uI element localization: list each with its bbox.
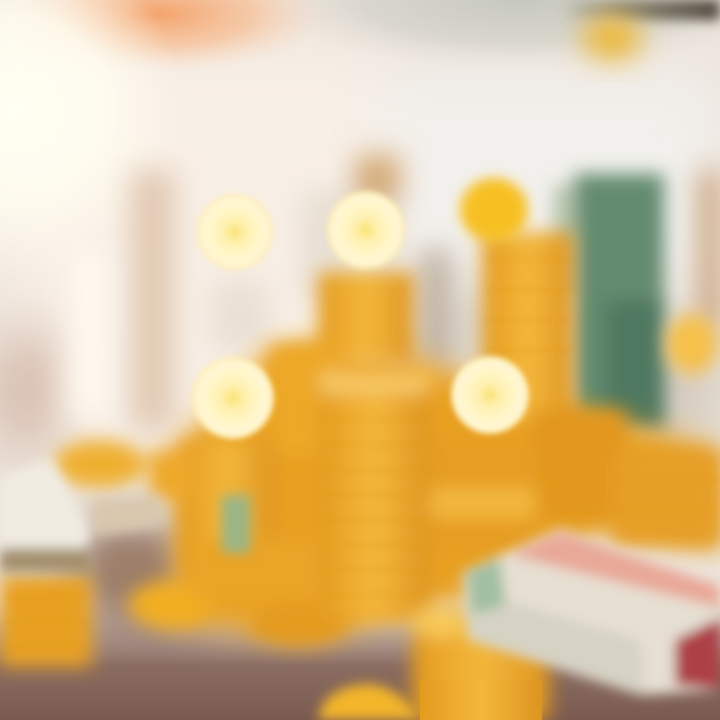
front coin [318,684,420,720]
icon: glowing coins [192,191,529,439]
chart: gold coin stacks [0,178,720,720]
panel: green banknote stack [554,174,665,430]
gold mass behind stacks [170,340,720,640]
green accent [222,495,250,553]
panel: white box left [0,458,165,572]
coin ridges [2,260,720,646]
front stack base [420,680,542,720]
coin: top yellow [460,178,528,242]
panel: banknote bundle right [462,528,720,695]
